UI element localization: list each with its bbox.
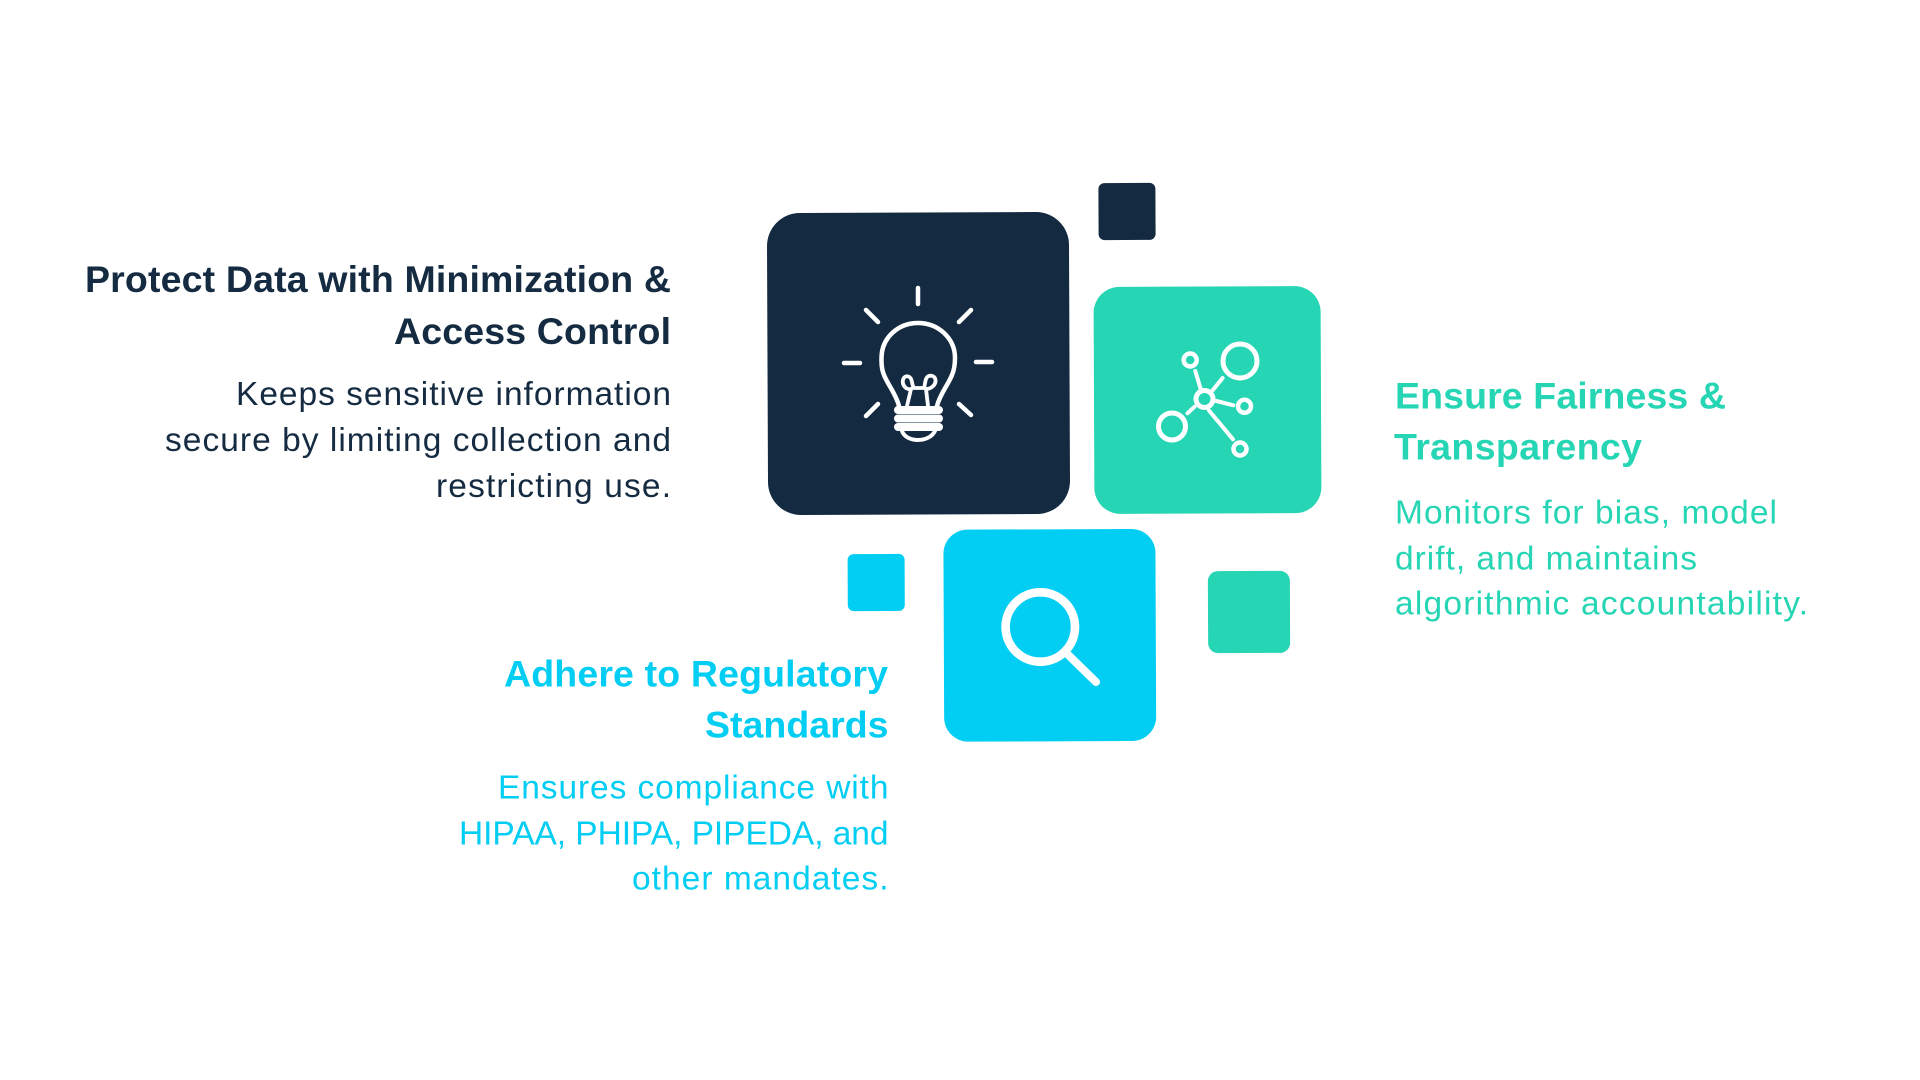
heading: protect data: [85, 258, 671, 352]
icon: lightbulb: [844, 288, 992, 440]
panel: small teal square: [1208, 571, 1290, 653]
heading: regulatory: [504, 652, 888, 746]
text block: fairness description: Monitors for bias, model: [1395, 494, 1777, 532]
heading: regulatory: Adhere to Regulatory: [504, 652, 888, 694]
panel: cyan tile with magnifier: [943, 529, 1156, 742]
text block: protect data description: restricting use.: [436, 468, 671, 505]
text block: regulatory description: other mandates.: [632, 860, 888, 898]
panel: teal tile with network: [1094, 286, 1321, 514]
text block: fairness description: [1395, 494, 1808, 622]
text block: protect data description: [165, 376, 671, 505]
heading: fairness: Transparency: [1394, 426, 1642, 468]
text block: fairness description: drift, and maintains: [1395, 540, 1697, 578]
heading: regulatory: Standards: [705, 704, 888, 746]
heading: fairness: Ensure Fairness &: [1395, 374, 1726, 416]
icon: network nodes: [1158, 344, 1257, 456]
panel: navy tile with lightbulb: [767, 212, 1070, 515]
panel: fairness text: [1394, 374, 1808, 622]
text block: fairness description: algorithmic accountability.: [1395, 586, 1808, 622]
heading: protect data: Access Control: [394, 310, 671, 352]
text block: protect data description: Keeps sensitive information: [236, 376, 671, 413]
heading: fairness: [1394, 374, 1726, 468]
text block: regulatory description: HIPAA, PHIPA, PIPEDA, and: [459, 816, 888, 852]
text block: protect data description: secure by limiting collection and: [165, 422, 671, 459]
icon: magnifying glass: [1006, 592, 1096, 682]
panel: small cyan square: [848, 554, 905, 611]
panel: small navy square: [1098, 183, 1156, 240]
text block: regulatory description: Ensures compliance with: [498, 770, 888, 806]
heading: protect data: Protect Data with Minimization &: [85, 258, 671, 300]
panel: protect data text: [85, 258, 671, 505]
panel: regulatory text: [459, 652, 888, 898]
text block: regulatory description: [459, 770, 888, 898]
